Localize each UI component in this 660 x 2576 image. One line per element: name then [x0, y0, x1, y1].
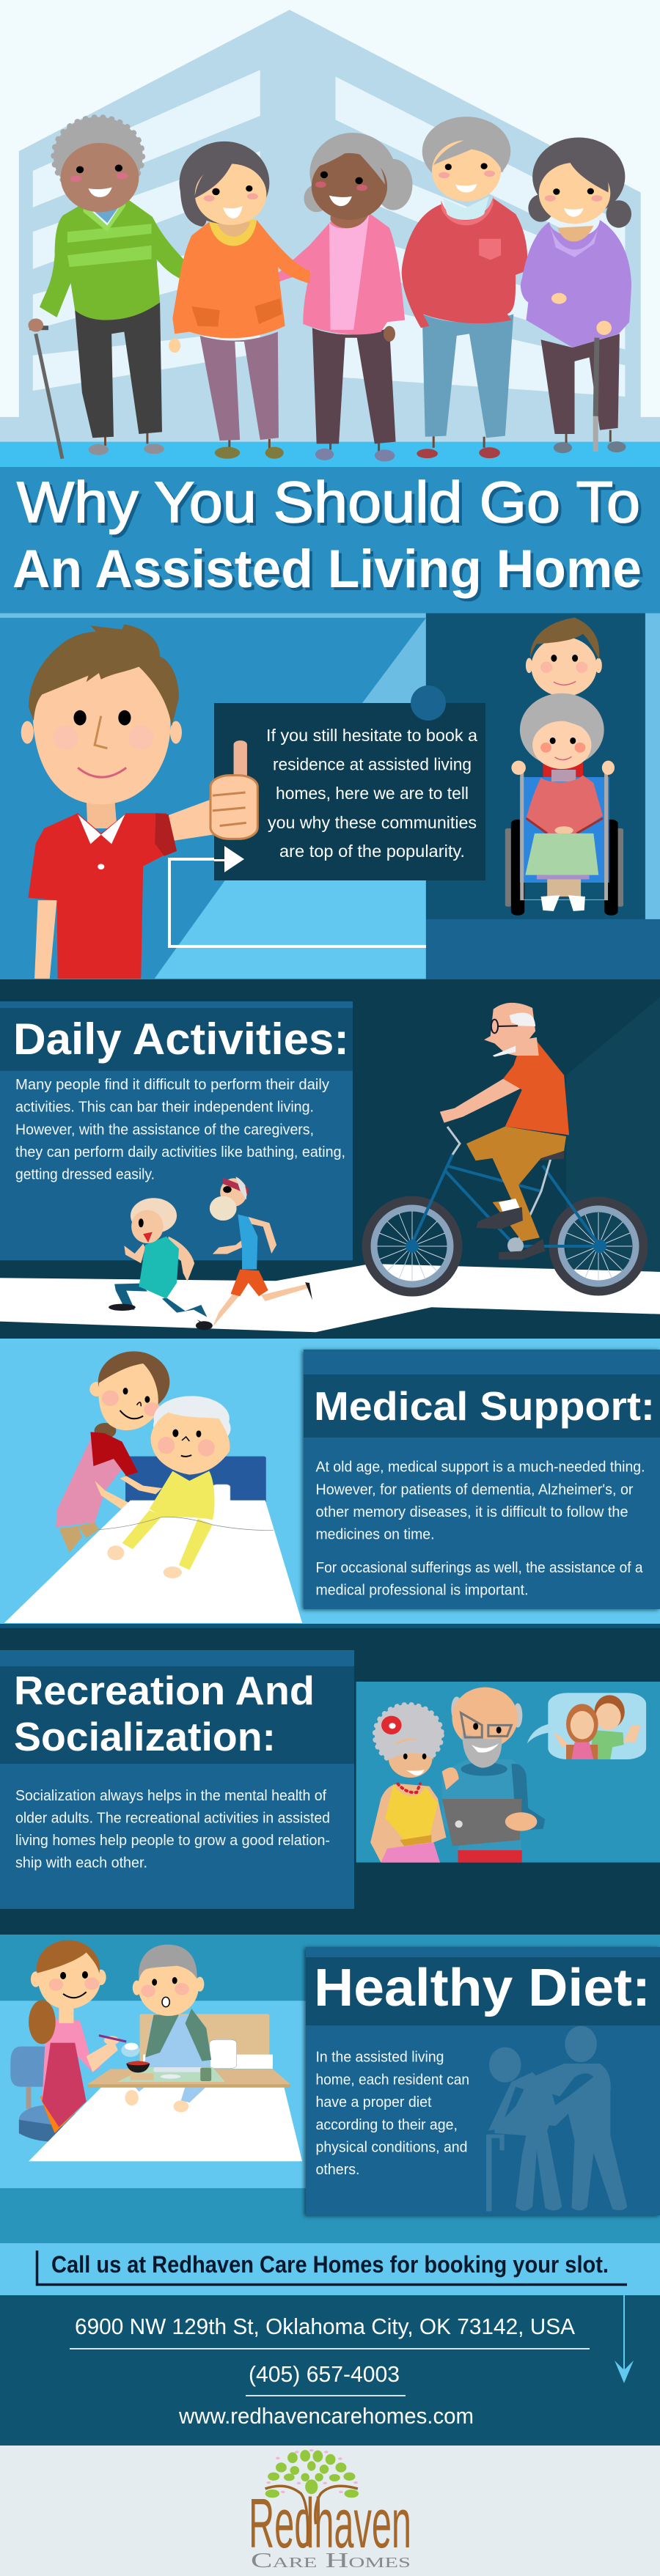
medical support text: For occasional sufferings as well, the assistance of a [315, 1559, 643, 1576]
icon: thumb [210, 740, 257, 839]
medical support text: medical professional is important. [315, 1581, 528, 1598]
arrow connector [169, 859, 426, 946]
title line 2: An Assisted Living Home [12, 540, 642, 599]
figure: elderly man on bicycle [367, 1003, 643, 1292]
logo tree [265, 2449, 359, 2546]
person: man in red sweater [402, 117, 527, 458]
panel: introduction [0, 614, 660, 980]
building backdrop [0, 10, 660, 467]
heading: healthy diet: Healthy Diet: [314, 1959, 650, 2017]
arrow head over box [214, 846, 244, 872]
figure: elderly man running [197, 1177, 312, 1328]
figure: caregiver and woman in wheelchair [505, 617, 623, 916]
callout: call to action: Call us at Redhaven Care Homes for booking your slot. [51, 2251, 609, 2278]
arrow: down [615, 2295, 634, 2383]
woman [370, 1704, 459, 1863]
caption box [214, 685, 485, 880]
panel: hero illustration [0, 0, 660, 469]
figure: caregiver feeding elderly man [0, 1940, 306, 2188]
healthy diet text: physical conditions, and [315, 2139, 468, 2156]
man with tablet [442, 1688, 545, 1863]
daily activities text: Many people find it difficult to perform their daily [15, 1076, 330, 1093]
hands on blanket [125, 2087, 206, 2112]
medical support text: At old age, medical support is a much-needed thing. [315, 1459, 645, 1476]
road and panel background [0, 997, 660, 1332]
figure: nurse helping woman in bed [4, 1351, 302, 1623]
bicycle frame [406, 1127, 606, 1254]
healthy diet text: home, each resident can [315, 2071, 469, 2088]
rider [440, 1003, 569, 1259]
medical support text [315, 1459, 645, 1598]
intro text [266, 726, 477, 861]
callout: call to action [0, 2243, 660, 2295]
person: woman in pink jacket [269, 133, 413, 461]
heading: daily activities: Daily Activities: [13, 1015, 349, 1064]
daily activities text [15, 1076, 345, 1183]
recreation text: ship with each other. [15, 1855, 147, 1871]
heading: medical support: Medical Support: [314, 1383, 655, 1429]
healthy diet text [315, 2049, 469, 2178]
person: man in green sweater with cane [28, 117, 186, 459]
panel: healthy diet [0, 1935, 660, 2243]
panel: contact details [0, 2295, 660, 2446]
heading: recreation and socialization [14, 1668, 315, 1759]
intro text: are top of the popularity. [279, 842, 465, 861]
recreation text: older adults. The recreational activities in assisted [15, 1809, 330, 1827]
healthy diet text: others. [315, 2161, 359, 2178]
healthy diet text: have a proper diet [315, 2094, 432, 2111]
person: woman in purple cardigan with cane [521, 137, 631, 453]
daily activities text: getting dressed easily. [15, 1166, 155, 1183]
intro text: homes, here we are to tell [276, 784, 469, 803]
speech bubble with family [527, 1693, 646, 1759]
intro text: If you still hesitate to book a [266, 726, 477, 745]
text card: recreation [0, 1650, 354, 1909]
panel: medical support [0, 1339, 660, 1628]
website: www.redhavencarehomes.com [178, 2403, 474, 2429]
bed blanket [29, 2088, 302, 2161]
figure: boy giving thumbs up [21, 625, 257, 979]
bicycle wheels [367, 1201, 643, 1292]
text card: medical support [304, 1350, 660, 1609]
man [133, 1945, 211, 2072]
medical support text: However, for patients of dementia, Alzheimer's, or [315, 1481, 634, 1498]
figure panel: couple on video call [356, 1682, 660, 1863]
figure: elderly woman running [109, 1198, 213, 1330]
people group [28, 117, 631, 461]
intro text: residence at assisted living [273, 755, 472, 774]
recreation text: Socialization always helps in the mental health of [15, 1787, 326, 1804]
panel: recreation and socialization [0, 1628, 660, 1935]
heading: recreation and socialization: Recreation And [14, 1668, 315, 1713]
logo wordmark: Redhaven [249, 2484, 411, 2563]
recreation text [15, 1787, 330, 1871]
person: woman in orange top [169, 141, 310, 459]
background shapes [0, 614, 660, 980]
medical support text: other memory diseases, it is difficult to follow the [315, 1504, 628, 1520]
daily activities text: activities. This can bar their independent living. [15, 1099, 314, 1116]
recreation text: living homes help people to grow a good relation- [15, 1832, 330, 1849]
chair [10, 2047, 78, 2142]
heading: recreation and socialization: Socialization: [14, 1714, 276, 1759]
phone: (405) 657-4003 [249, 2361, 400, 2387]
woman [29, 1940, 140, 2133]
panel: daily activities [0, 979, 660, 1339]
address: 6900 NW 129th St, Oklahoma City, OK 73142, USA [75, 2314, 575, 2339]
bed [140, 2014, 273, 2069]
icon: silhouette of caregiver helping elder [486, 2026, 627, 2212]
healthy diet text: according to their age, [315, 2116, 458, 2133]
intro text: you why these communities [268, 813, 477, 832]
healthy diet text: In the assisted living [315, 2049, 444, 2066]
daily activities text: However, with the assistance of the caregivers, [15, 1121, 314, 1138]
medical support text: medicines on time. [315, 1526, 434, 1542]
tray table [87, 2061, 290, 2088]
text card: healthy diet [306, 1947, 660, 2215]
daily activities text: they can perform daily activities like bathing, eating, [15, 1144, 345, 1160]
logo tagline: Care Homes [251, 2549, 411, 2572]
title line 1: Why You Should Go To [17, 469, 640, 534]
title banner [0, 467, 660, 614]
footer: logo [0, 2446, 660, 2576]
